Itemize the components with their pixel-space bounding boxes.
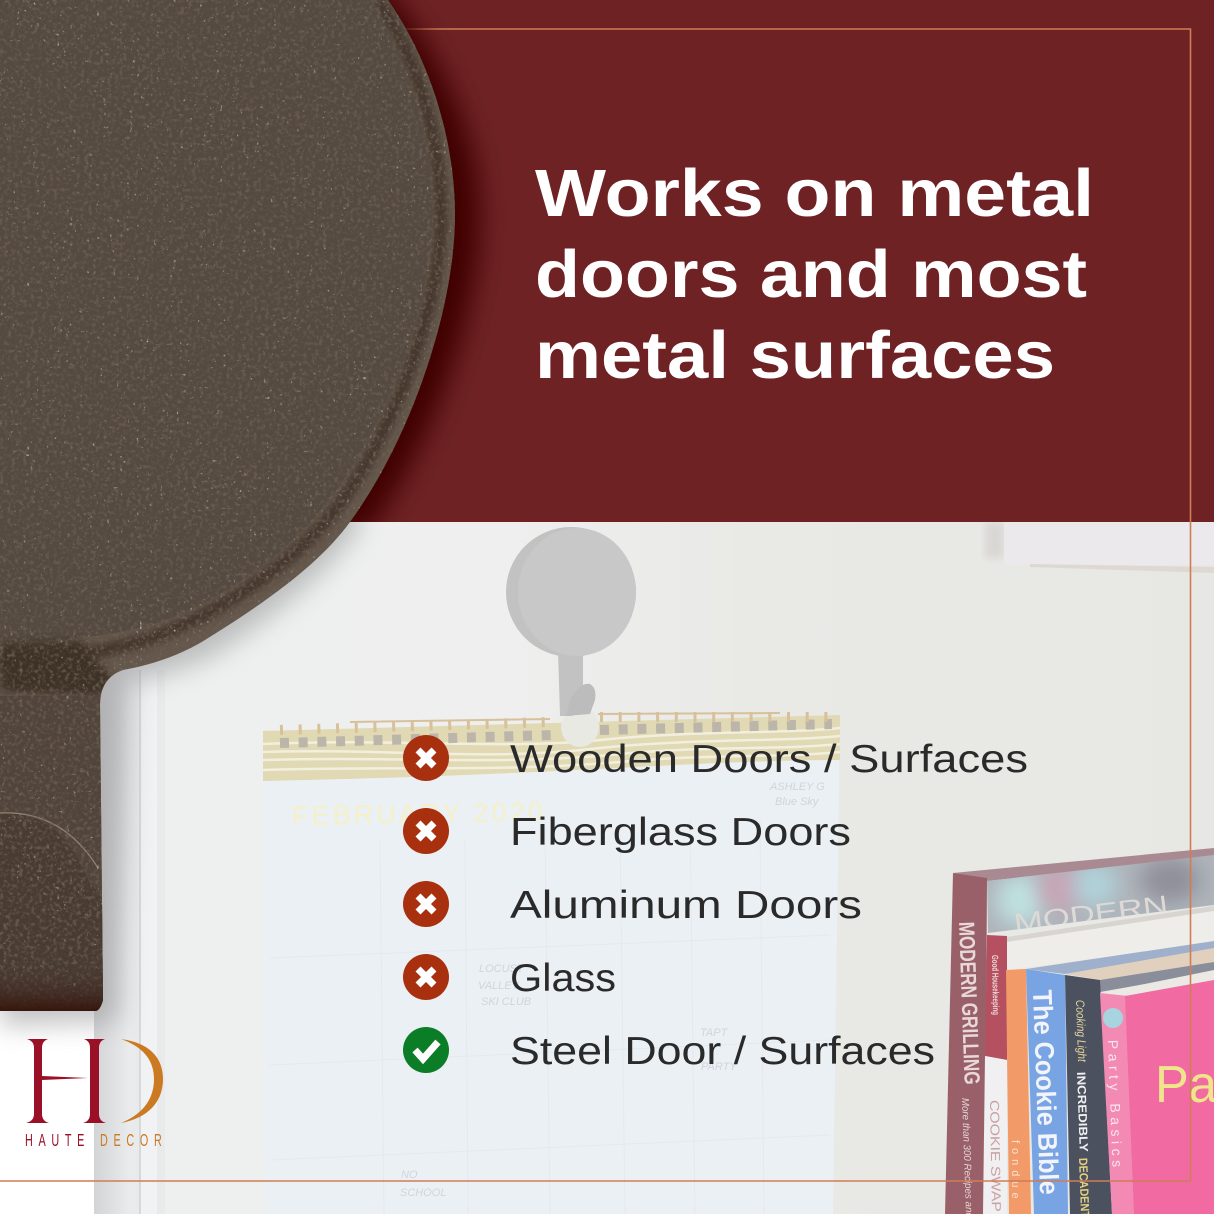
book: Incredibly Decadent: Cooking Light <box>1073 1000 1089 1063</box>
label: Aluminum Doors <box>510 884 862 927</box>
book: Modern Grilling: MODERN GRILLING <box>954 921 985 1085</box>
books <box>945 848 1214 1214</box>
heading: metal surfaces <box>535 318 1055 393</box>
heading <box>535 156 1094 393</box>
calendar handwritten notes: ASHLEY G <box>769 781 825 793</box>
heading: Works on metal <box>535 156 1094 231</box>
heading: doors and most <box>535 237 1087 312</box>
row: fiberglass doors <box>403 808 851 854</box>
row: steel door <box>403 1027 935 1073</box>
book: fondue <box>1006 969 1031 1214</box>
book: Modern Grilling: MODERN <box>1012 889 1170 938</box>
stem <box>0 696 106 1014</box>
calendar grid <box>270 820 830 1214</box>
logo letter H <box>26 1039 106 1123</box>
book: Good Housekeeping: COOKIE SWAP <box>987 1100 1004 1212</box>
logo letter D <box>121 1039 163 1123</box>
book: Party Basics <box>1100 970 1214 1214</box>
logo: Haute Decor <box>25 1039 167 1151</box>
book: Incredibly Decadent: INCREDIBLY <box>1074 1072 1091 1152</box>
book: Good Housekeeping: Good Housekeeping <box>990 955 1001 1015</box>
label: Fiberglass Doors <box>510 811 851 854</box>
icon: red cross <box>403 881 449 927</box>
hook photo <box>506 527 636 747</box>
object shadow <box>0 0 480 1026</box>
label: Glass <box>510 957 616 1000</box>
row: glass <box>403 954 616 1000</box>
calendar handwritten notes: NO <box>401 1169 418 1181</box>
calendar handwritten notes: VALLEY <box>478 980 520 992</box>
calendar month title: FEBRUARY 2020 <box>292 797 546 831</box>
hook stem <box>558 650 583 716</box>
icon: red cross <box>403 808 449 854</box>
panel: photo background wall <box>0 522 1214 1214</box>
recessed dark groove <box>0 0 441 664</box>
calendar handwritten notes: SKI CLUB <box>481 996 531 1008</box>
calendar spiral rings <box>280 713 832 743</box>
icon: green check <box>403 1027 449 1073</box>
calendar handwritten notes: Blue Sky <box>775 796 820 808</box>
row: wooden doors <box>403 735 1028 781</box>
icon: red cross <box>403 735 449 781</box>
neck shadow <box>0 640 114 696</box>
magnet disc <box>506 527 636 657</box>
book: The Cookie Bible <box>1026 941 1214 1214</box>
calendar handwritten notes <box>400 781 825 1199</box>
calendar handwritten notes: PARTY <box>701 1061 737 1073</box>
calendar <box>263 713 840 1214</box>
label: Wooden Doors / Surfaces <box>510 738 1028 781</box>
panel: maroon heading background <box>0 0 1214 522</box>
book: Incredibly Decadent <box>1065 948 1214 1214</box>
disc face <box>0 0 432 642</box>
calendar handwritten notes: TAPT <box>700 1027 729 1039</box>
logo wordmark haute: HAUTE <box>25 1131 90 1151</box>
logo wordmark decor: DECOR <box>100 1131 167 1151</box>
calendar handwritten notes: LOCUST <box>479 963 525 975</box>
hook tongue <box>0 813 103 1012</box>
hook shadow bump <box>561 707 599 747</box>
book: Good Housekeeping <box>983 906 1214 1214</box>
white corner behind logo <box>0 1011 94 1214</box>
calendar handwritten notes: SCHOOL <box>400 1187 446 1199</box>
compatibility list <box>403 735 1028 1073</box>
icon: red cross <box>403 954 449 1000</box>
label: Steel Door / Surfaces <box>510 1030 935 1073</box>
book: Modern Grilling <box>945 848 1214 1214</box>
book: Party Basics: Party Basics <box>1105 1040 1126 1172</box>
magnet hook close-up <box>0 0 480 1026</box>
object body <box>0 0 455 1011</box>
book: The Cookie Bible: The Cookie Bible <box>1027 989 1064 1195</box>
row: aluminum doors <box>403 881 862 927</box>
calendar header band <box>263 715 840 781</box>
book: fondue: fondue <box>1009 1140 1021 1204</box>
hook tip <box>566 684 595 716</box>
